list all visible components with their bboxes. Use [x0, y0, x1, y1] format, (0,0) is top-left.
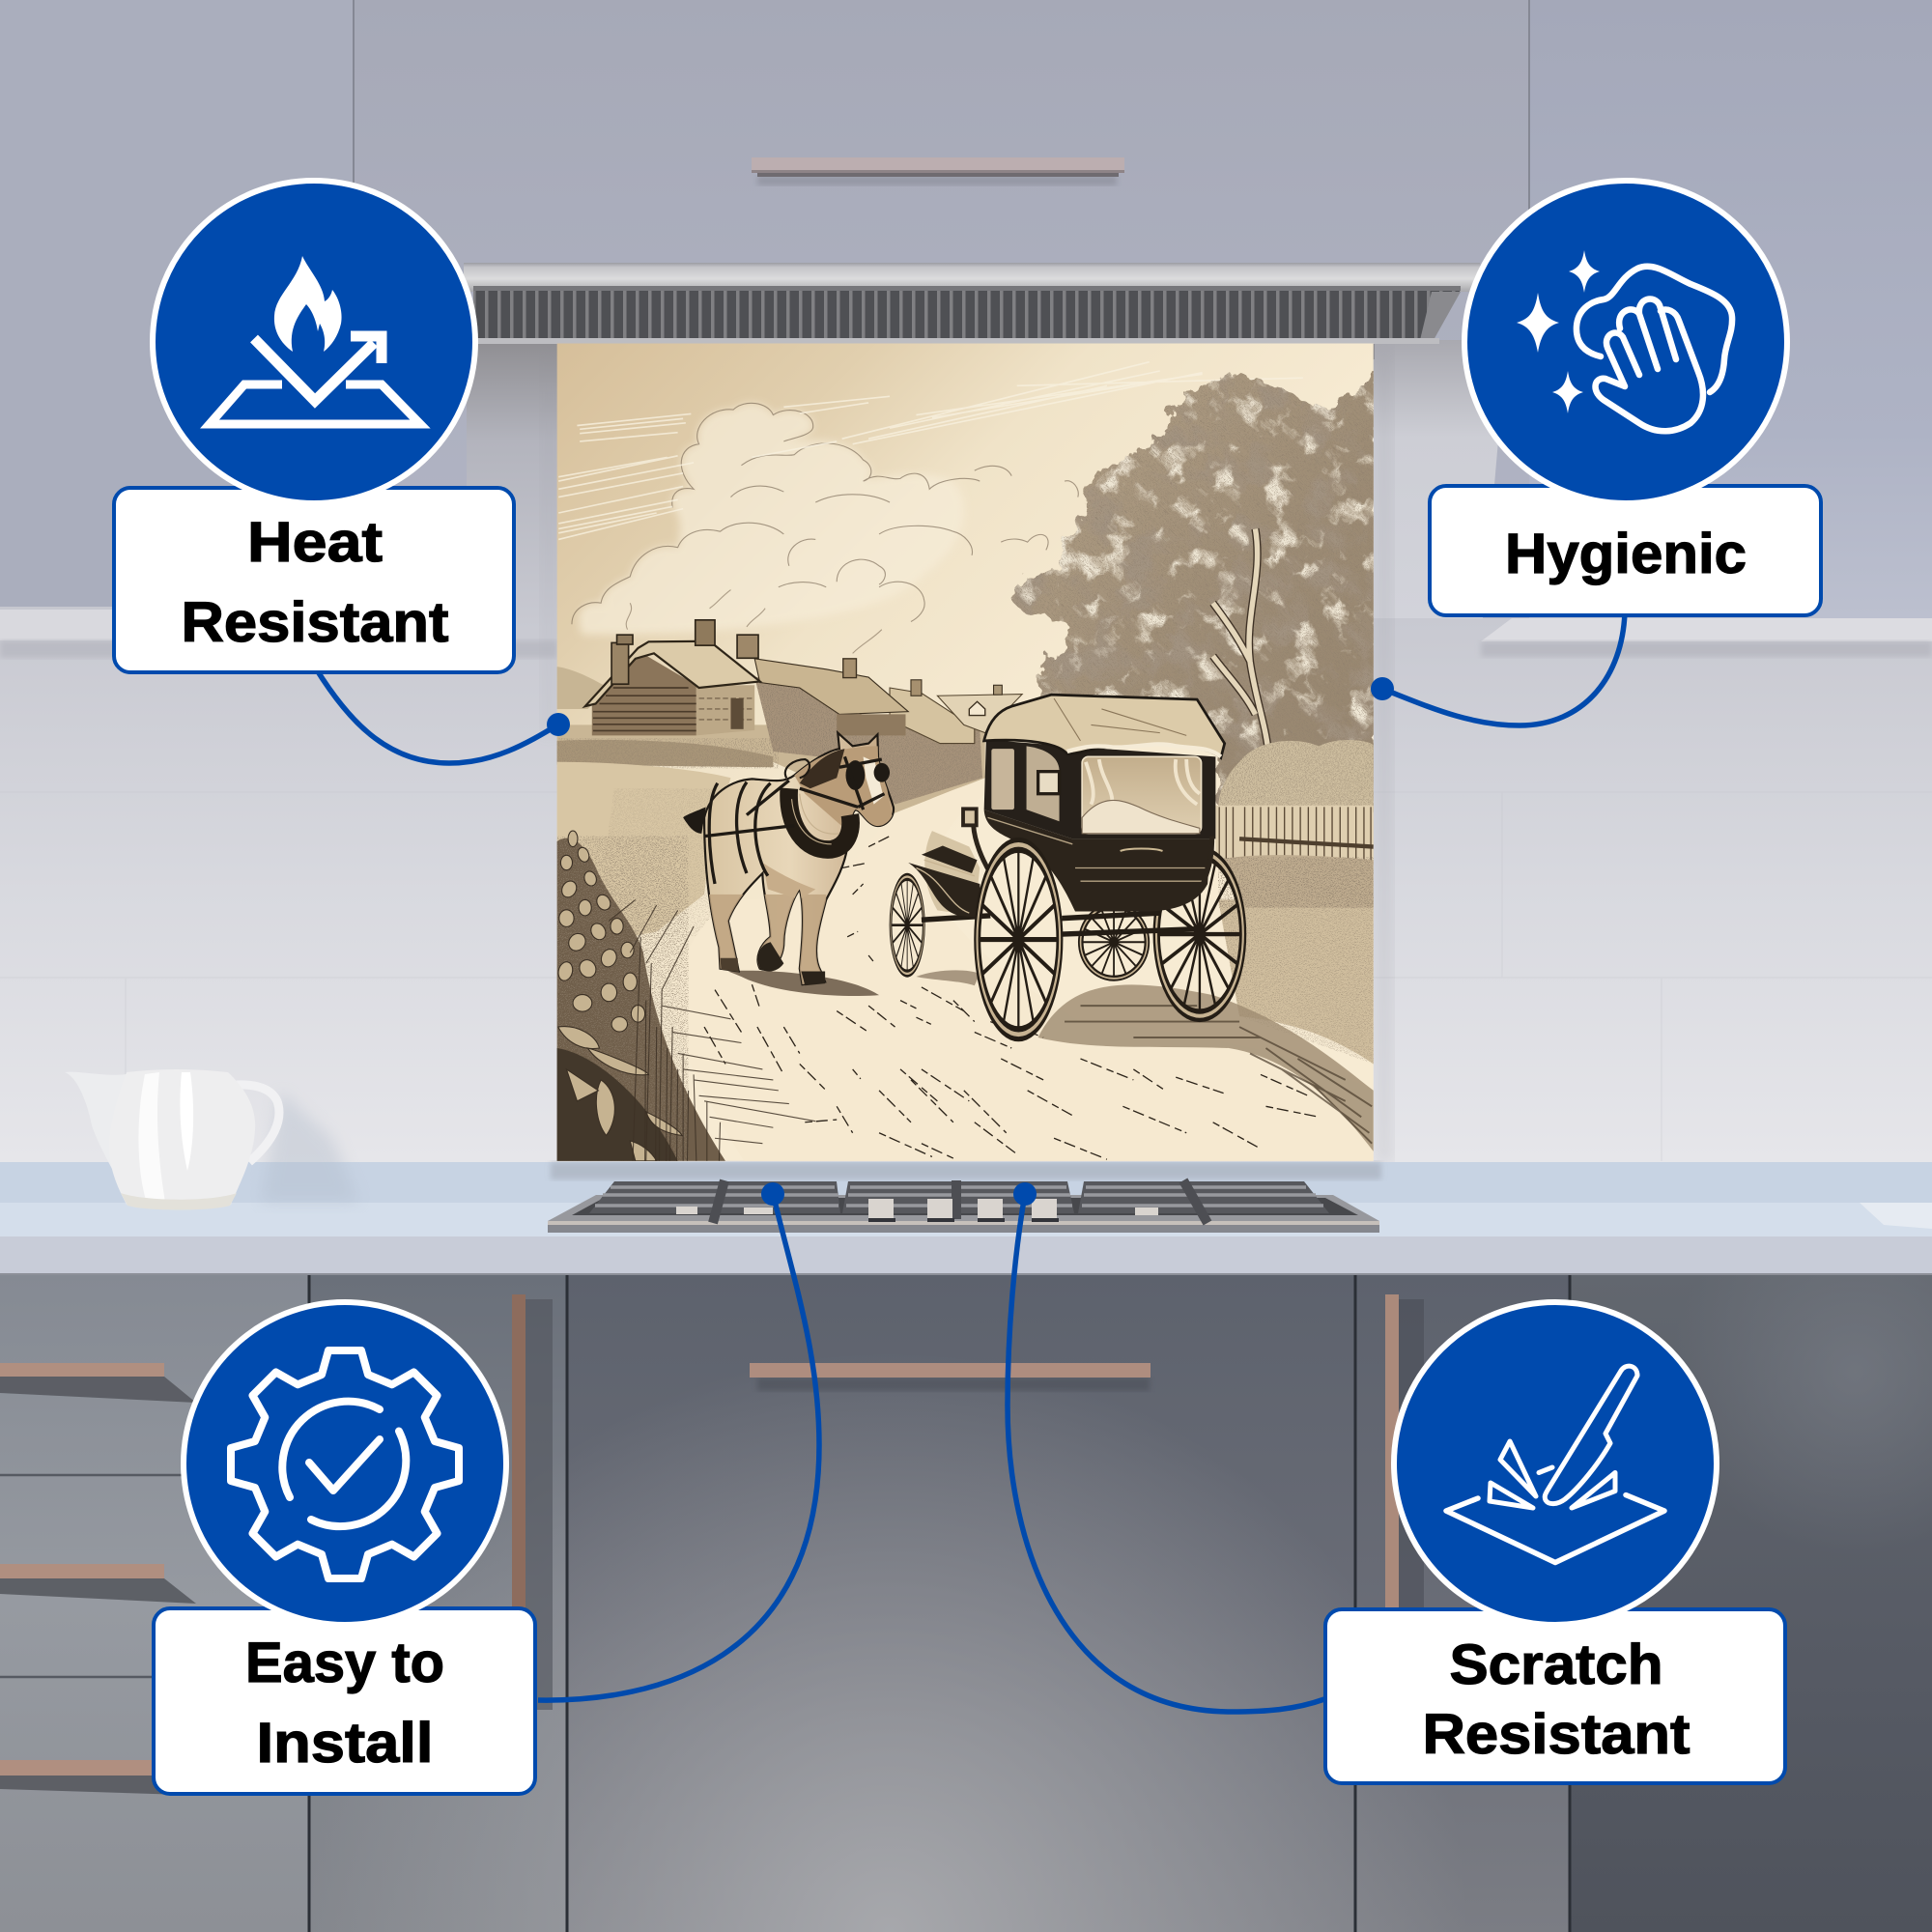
label box: hygienic: [1430, 486, 1821, 615]
carriage rear wheels: [1079, 848, 1245, 1020]
label box: easy to install: [154, 1608, 535, 1794]
small front wheel and undercarriage: [890, 845, 1200, 976]
clouds: [572, 403, 1078, 635]
countertop: [0, 1162, 1932, 1275]
connector: easy to install: [538, 1182, 819, 1700]
label text: Easy to Install: Install: [257, 1712, 433, 1775]
carriage body: [961, 695, 1225, 911]
tree: [1011, 370, 1378, 810]
icon badge: gear with check: [184, 1302, 506, 1625]
hob: [548, 1180, 1379, 1233]
icon badge: knife on surface: [1394, 1302, 1717, 1625]
upper cabinets: [0, 0, 1932, 618]
carriage front wheel: [975, 839, 1062, 1039]
label text: Heat Resistant: Resistant: [182, 591, 448, 654]
extractor hood: [464, 263, 1480, 344]
connector: hygienic: [1371, 611, 1625, 725]
sky: [557, 343, 1374, 1161]
icon badge: flame on surface: [153, 181, 475, 503]
connector: scratch resistant: [1008, 1182, 1324, 1712]
teapot: [65, 1069, 359, 1209]
cabinet underside strips: [0, 607, 1932, 658]
upper cabinet handle: [752, 157, 1124, 185]
road ruts and hatching: [704, 837, 1319, 1159]
panel: sepia horse and carriage splashback: [556, 343, 1378, 1161]
right verge and fence: [1215, 806, 1374, 1064]
wall: [0, 340, 1932, 1164]
horse: [683, 733, 895, 990]
label text: Hygienic: Hygienic: [1505, 523, 1747, 585]
label box: heat resistant: [114, 488, 514, 672]
connector: heat resistant: [316, 668, 570, 763]
callout: scratch resistant: [1008, 1182, 1785, 1783]
cabinet handles: [0, 1294, 1424, 1795]
label text: Scratch Resistant: Scratch: [1449, 1634, 1663, 1696]
callout: heat resistant: [114, 181, 570, 763]
label text: Easy to Install: Easy to: [245, 1632, 444, 1694]
label text: Heat Resistant: Heat: [247, 511, 383, 574]
label text: Scratch Resistant: [1422, 1634, 1690, 1766]
left hill: [557, 762, 730, 937]
lower cabinets: [0, 1275, 1932, 1932]
wheel shadows on road: [728, 970, 1374, 1151]
sky streaks: [558, 362, 1303, 539]
callout: easy to install: [154, 1182, 819, 1794]
icon badge: hand wiping with sparkles: [1464, 181, 1787, 503]
houses: [585, 590, 1022, 744]
label text: Easy to Install: [245, 1632, 444, 1775]
callout: hygienic: [1371, 181, 1821, 725]
label text: Heat Resistant: [182, 511, 448, 654]
bottom-left foliage: [556, 831, 815, 1161]
label box: scratch resistant: [1325, 1609, 1785, 1783]
road: [669, 779, 1374, 1161]
back hills and bushes: [557, 667, 985, 815]
label text: Scratch Resistant: Resistant: [1422, 1703, 1690, 1766]
